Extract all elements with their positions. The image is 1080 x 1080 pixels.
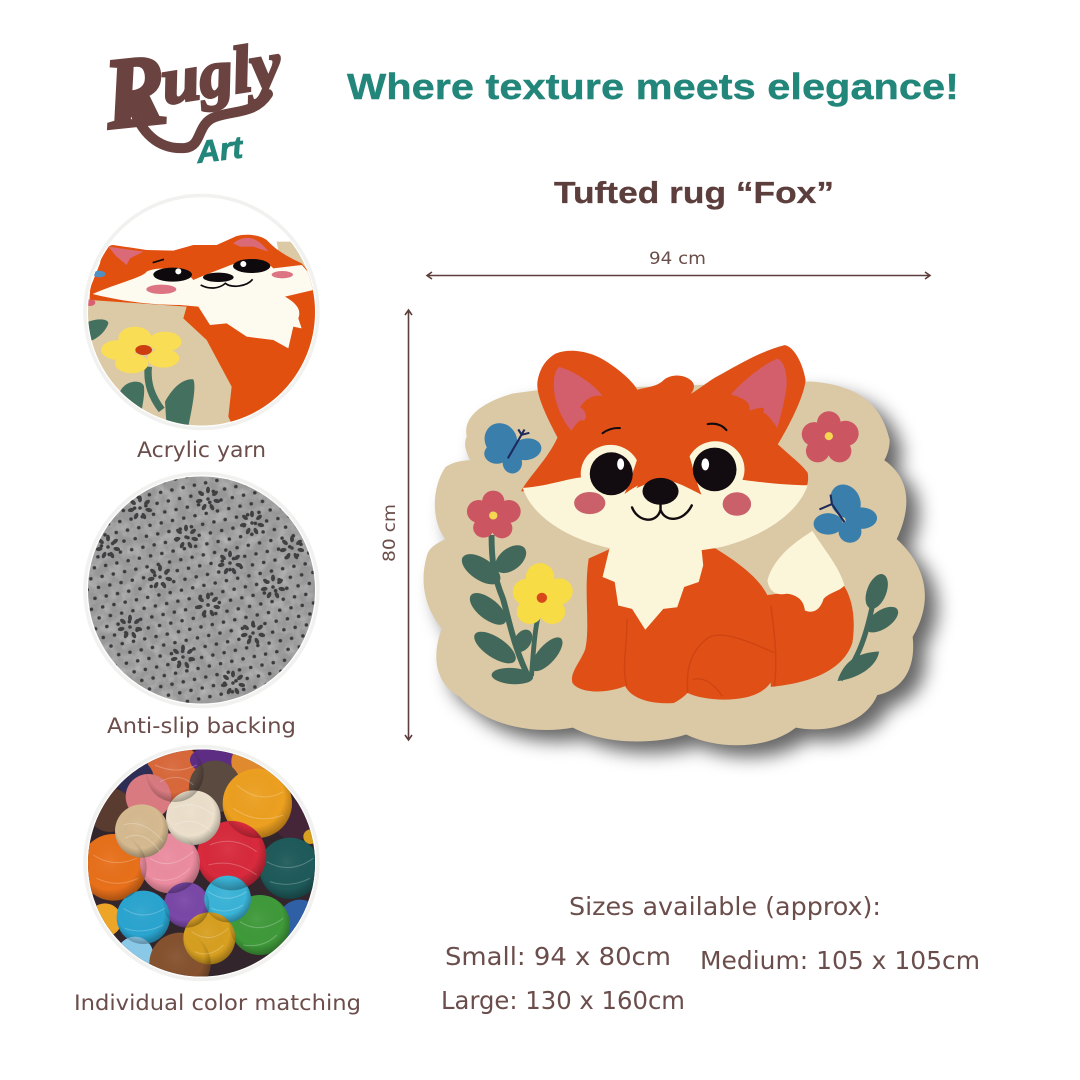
circle ring	[85, 474, 318, 706]
sizes heading: Sizes available (approx):	[569, 892, 881, 921]
caption: acrylic yarn: Acrylic yarn	[137, 438, 266, 462]
fox chest	[603, 548, 703, 630]
rug shadow	[436, 393, 937, 757]
height label: 80 cm	[380, 504, 400, 562]
pink flower left	[467, 491, 521, 538]
circle photo: acrylic yarn close-up	[80, 190, 325, 435]
width arrow	[427, 272, 930, 279]
circle ring	[85, 746, 318, 980]
close-up photo content	[88, 234, 315, 426]
caption: anti-slip backing: Anti-slip backing	[107, 714, 296, 738]
tagline heading: Where texture meets elegance!	[347, 66, 959, 107]
size small: Small: 94 x 80cm	[445, 942, 671, 971]
rug photo: fox	[424, 345, 937, 757]
circle photo: anti-slip backing	[85, 473, 319, 707]
logo letters ugly: ugly	[156, 28, 287, 119]
tail orange	[764, 585, 854, 687]
fox body seams	[625, 606, 776, 696]
fox brows	[603, 424, 726, 433]
fox tail	[764, 531, 854, 687]
fox nose and mouth	[632, 478, 692, 520]
height arrow	[405, 310, 412, 740]
butterfly upper left	[479, 418, 543, 473]
tail white tip	[767, 531, 844, 612]
pink flower upper right	[802, 411, 859, 462]
logo word Art: Art	[194, 129, 246, 170]
fox body	[572, 548, 777, 703]
left plant	[457, 535, 568, 686]
yellow flower	[513, 563, 573, 624]
fox face white	[523, 441, 808, 553]
right plant	[838, 571, 903, 681]
circle photo: yarn balls	[80, 743, 325, 994]
backing texture	[85, 473, 319, 707]
logo: Rugly Art	[99, 28, 287, 170]
fox right ear inner	[731, 359, 787, 428]
caption: individual color matching: Individual color matching	[74, 991, 361, 1015]
height dimension	[380, 310, 412, 740]
fox cheeks	[574, 492, 751, 516]
circle ring	[85, 196, 318, 428]
size large: Large: 130 x 160cm	[441, 986, 685, 1015]
fox eyes	[590, 448, 737, 495]
size medium: Medium: 105 x 105cm	[700, 946, 980, 975]
width dimension	[427, 249, 930, 279]
butterfly right	[814, 480, 877, 543]
logo swash	[132, 94, 268, 148]
logo letter R: R	[99, 33, 171, 150]
width label: 94 cm	[649, 249, 706, 269]
product title: Tufted rug “Fox”	[554, 175, 834, 210]
fox head	[521, 345, 808, 495]
rug base	[424, 381, 925, 745]
sizes block	[441, 892, 980, 1015]
fox left ear inner	[554, 367, 603, 431]
yarn balls photo content	[88, 750, 315, 976]
